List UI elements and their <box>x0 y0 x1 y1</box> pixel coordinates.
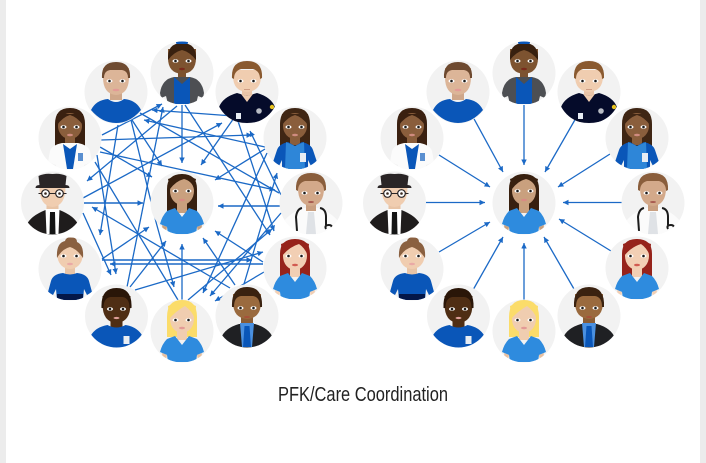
person: blonde nurse <box>492 300 556 362</box>
arrows converging on the centre <box>426 105 622 300</box>
person: blonde nurse <box>150 300 214 362</box>
right grey margin <box>700 0 706 463</box>
person: woman in grey cardigan <box>150 41 214 104</box>
person: police officer <box>216 60 278 124</box>
person: central patient <box>150 172 214 234</box>
person: man in blue shirt <box>84 60 148 124</box>
person: woman in grey cardigan <box>492 41 556 104</box>
person: red-haired nurse <box>264 236 326 300</box>
person: man in hat and glasses <box>21 172 84 235</box>
diagram: coordinated care, all arrows point to the central person <box>363 41 684 362</box>
left grey margin <box>0 0 6 463</box>
person: central patient <box>492 172 556 234</box>
person: man in blue scrubs <box>427 284 490 348</box>
person: woman in white coat <box>38 106 102 170</box>
person: man in blue scrubs <box>85 284 148 348</box>
person: man in dark suit <box>558 284 620 348</box>
person: man in hat and glasses <box>363 172 426 235</box>
person: woman in blue sweater <box>38 237 102 300</box>
person: woman with braids <box>264 106 326 170</box>
caption: PFK/Care Coordination <box>278 384 448 406</box>
person: doctor with stethoscope <box>622 172 684 235</box>
person: police officer <box>558 60 620 124</box>
person: woman in white coat <box>380 106 444 170</box>
person: woman with braids <box>606 106 668 170</box>
person: man in blue shirt <box>426 60 490 124</box>
person: doctor with stethoscope <box>280 172 342 235</box>
person: woman in blue sweater <box>380 237 444 300</box>
person: man in dark suit <box>216 284 278 348</box>
person: red-haired nurse <box>606 236 668 300</box>
diagram: uncoordinated care, tangled arrows between all people <box>21 41 342 362</box>
tangled connection arrows <box>83 104 281 301</box>
